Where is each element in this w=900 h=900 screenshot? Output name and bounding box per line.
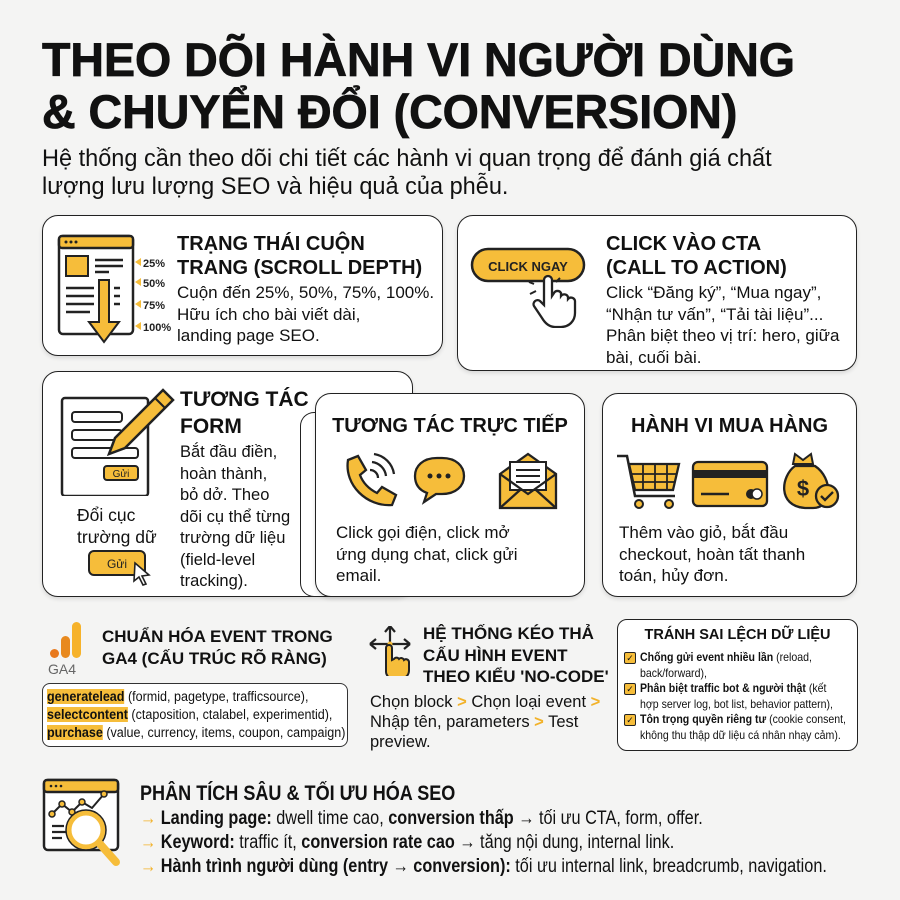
text: hoàn thành,: [180, 464, 267, 482]
checklist: back/forward),: [640, 666, 707, 680]
text: side caption: trường dữ: [77, 527, 157, 547]
heading: TƯƠNG TÁC TRỰC TIẾP: [332, 415, 568, 437]
heading: [180, 387, 309, 438]
heading: (CALL TO ACTION): [606, 257, 787, 279]
text: bỏ dở. Theo: [180, 486, 269, 504]
title: [42, 33, 795, 138]
icon: CTA button with hand: CLICK NGAY: [488, 259, 568, 274]
icons: cart card money bag: $: [797, 476, 809, 501]
panel: direct interaction: [315, 393, 585, 597]
icons: cart card money bag: [617, 452, 840, 510]
icon: scroll page: [58, 234, 171, 344]
text: [177, 283, 434, 345]
heading: CHUẨN HÓA EVENT TRONG: [102, 627, 333, 646]
heading: CẤU HÌNH EVENT: [423, 646, 568, 664]
bullet list: → Hành trình người dùng (entry → conversion): tối ưu internal link, breadcrumb, navigation.: [140, 856, 827, 877]
heading: TRÁNH SAI LỆCH DỮ LIỆU: [644, 627, 831, 643]
text: “Nhận tư vấn”, “Tải tài liệu”...: [606, 304, 823, 324]
subtitle: [42, 145, 772, 200]
heading: [177, 232, 422, 279]
event list box: [42, 683, 348, 747]
icon: send button cursor: Gửi: [107, 557, 127, 571]
text: (field-level: [180, 550, 255, 568]
text: ứng dụng chat, click gửi: [336, 544, 518, 564]
icon: send button cursor: [88, 550, 151, 586]
panel: avoid data bias: [617, 619, 858, 751]
icon: GA4 logo: [48, 622, 81, 676]
event list box: generatelead (formid, pagetype, trafficsource),: [47, 689, 308, 704]
subtitle: Hệ thống cần theo dõi chi tiết các hành vi quan trọng để đánh giá chất: [42, 145, 772, 172]
text: Nhập tên, parameters > Test: [370, 713, 578, 731]
icon: form with pencil: Gửi: [113, 468, 129, 480]
checklist: ✓: [626, 715, 634, 725]
text: bài, cuối bài.: [606, 348, 701, 366]
heading: [606, 232, 787, 279]
event list box: purchase (value, currency, items, coupon, campaign): [47, 725, 345, 740]
text: [370, 693, 600, 751]
icon: form with pencil: [60, 388, 175, 496]
text: Bắt đầu điền,: [180, 443, 277, 461]
checklist: Tôn trọng quyền riêng tư (cookie consent,: [640, 712, 846, 726]
heading: GA4 (CẤU TRÚC RÕ RÀNG): [102, 649, 327, 668]
text: trường dữ liệu: [180, 529, 285, 547]
heading: HỆ THỐNG KÉO THẢ: [423, 624, 594, 643]
heading: THEO KIỂU 'NO-CODE': [423, 667, 609, 686]
checklist: ✓: [626, 684, 634, 694]
event list box: selectcontent (ctaposition, ctalabel, experimentid),: [47, 707, 332, 722]
checklist: Chống gửi event nhiều lần (reload,: [640, 650, 812, 664]
heading: HÀNH VI MUA HÀNG: [631, 415, 828, 437]
text: Thêm vào giỏ, bắt đầu: [619, 523, 788, 542]
heading: [423, 624, 609, 686]
heading: TRẠNG THÁI CUỘN: [177, 233, 365, 255]
text: Click gọi điện, click mở: [336, 523, 510, 542]
section: deep analysis SEO: [42, 778, 827, 877]
text: [180, 442, 290, 590]
icon: scroll page: 75%: [143, 300, 165, 312]
bullet list: [140, 808, 827, 877]
panel: purchase behavior: [602, 393, 857, 597]
text: Phân biệt theo vị trí: hero, giữa: [606, 326, 839, 345]
text: toán, hủy đơn.: [619, 566, 728, 585]
text: landing page SEO.: [177, 326, 320, 345]
text: [606, 283, 840, 366]
checklist: hợp server log, bot list, behavior pattern),: [640, 696, 833, 710]
icon: scroll page: 100%: [143, 322, 171, 334]
section: GA4 standardization: [42, 622, 348, 747]
heading: FORM: [180, 415, 242, 438]
panel: scroll depth: [42, 215, 443, 356]
subtitle: lượng lưu lượng SEO và hiệu quả của phễu.: [42, 173, 508, 200]
text: dõi cụ thể từng: [180, 508, 290, 526]
panel: CTA click: [457, 215, 857, 371]
text: Click “Đăng ký”, “Mua ngay”,: [606, 283, 821, 302]
checklist: [624, 650, 846, 742]
text: preview.: [370, 733, 431, 751]
text: Hữu ích cho bài viết dài,: [177, 304, 360, 324]
heading: [102, 627, 333, 668]
checklist: không thu thập dữ liệu cá nhân nhạy cảm).: [640, 728, 841, 742]
bullet list: → Landing page: dwell time cao, conversion thấp → tối ưu CTA, form, offer.: [140, 808, 703, 829]
heading: TRANG (SCROLL DEPTH): [177, 257, 422, 279]
text: Chọn block > Chọn loại event >: [370, 693, 600, 711]
icon: CTA button with hand: [470, 248, 586, 328]
bullet list: → Keyword: traffic ít, conversion rate cao → tăng nội dung, internal link.: [140, 832, 674, 853]
checklist: Phân biệt traffic bot & người thật (kết: [640, 681, 826, 695]
checklist: ✓: [626, 653, 634, 663]
text: Cuộn đến 25%, 50%, 75%, 100%.: [177, 283, 434, 302]
text: [619, 523, 805, 585]
title: & CHUYỂN ĐỔI (CONVERSION): [42, 85, 737, 138]
text: side caption: [77, 505, 157, 547]
heading: PHÂN TÍCH SÂU & TỐI ƯU HÓA SEO: [140, 782, 455, 805]
icon: scroll page: 25%: [143, 258, 165, 270]
heading: TƯƠNG TÁC: [180, 388, 309, 411]
section: drag and drop no-code: [369, 624, 609, 751]
icon: scroll page: 50%: [143, 278, 165, 290]
icon: drag hand arrows: [369, 626, 411, 676]
text: email.: [336, 566, 381, 585]
panel: form interaction: [42, 371, 413, 597]
title: THEO DÕI HÀNH VI NGƯỜI DÙNG: [42, 33, 795, 86]
icons: phone chat email: [346, 452, 558, 510]
text: checkout, hoàn tất thanh: [619, 544, 805, 564]
icon: analytics magnifier: [42, 778, 120, 866]
text: [336, 523, 518, 585]
heading: CLICK VÀO CTA: [606, 233, 761, 255]
text: side caption: Đổi cục: [77, 505, 135, 525]
text: tracking).: [180, 572, 248, 590]
